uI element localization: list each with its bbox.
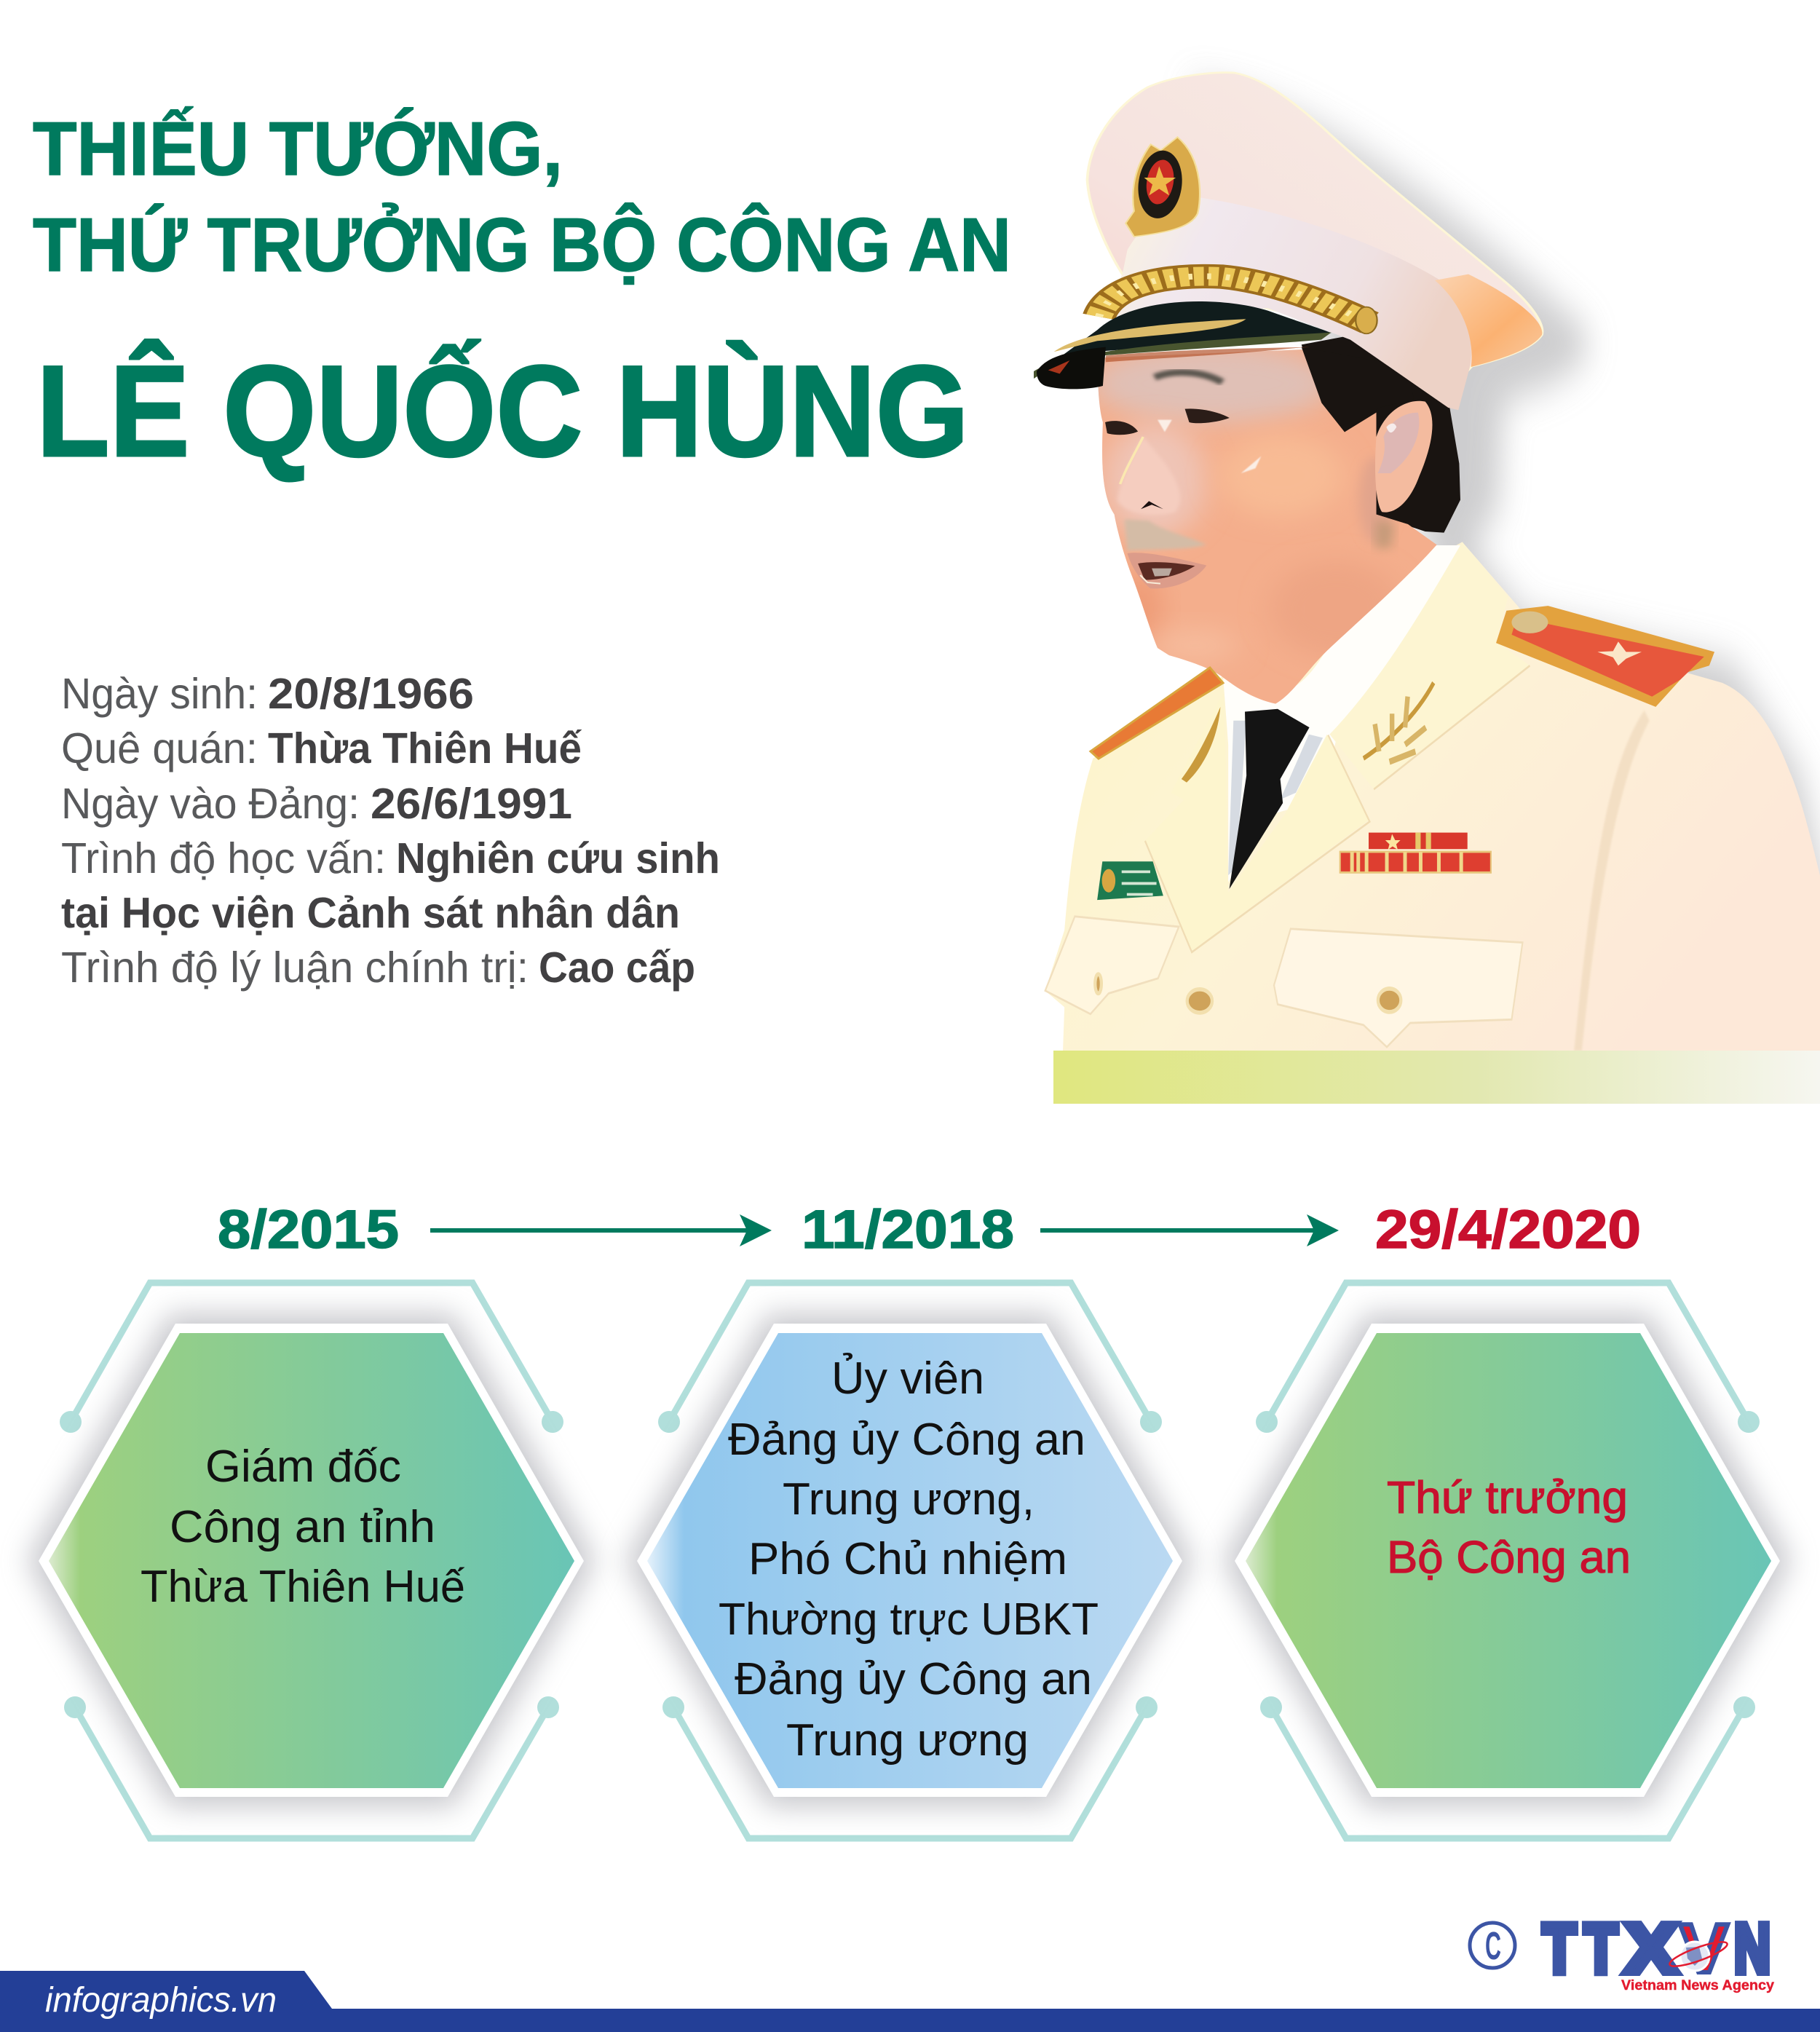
- biography text block: Nghiên cứu sinh: [396, 834, 720, 882]
- logo tagline: Vietnam News Agency: [1621, 1978, 1774, 1993]
- head and face: [1091, 335, 1460, 704]
- title line 2: THỨ TRƯỞNG BỘ CÔNG AN: [33, 202, 1011, 288]
- sleeve shading: [1574, 711, 1650, 1051]
- name tag: [1097, 861, 1163, 900]
- biography text block: Trình độ lý luận chính trị:: [61, 944, 529, 992]
- hexagon 2 text: Trung ương: [786, 1715, 1029, 1766]
- footer band: [0, 1971, 1820, 2032]
- cap badge: [1125, 137, 1200, 237]
- biography text block: Ngày sinh:: [61, 670, 258, 718]
- hexagon fill 1: [49, 1333, 574, 1788]
- footer site name: infographics.vn: [45, 1981, 277, 2020]
- logo wordmark: X: [1625, 1910, 1677, 1988]
- visor band: [1064, 301, 1332, 355]
- cap orange underside: [1435, 274, 1542, 367]
- visor gold leaf: [1054, 319, 1246, 352]
- portrait of Lê Quốc Hùng: [1034, 73, 1820, 1051]
- title: [33, 107, 1011, 483]
- shirt shade: [1228, 721, 1323, 875]
- arrow 1: [430, 1214, 772, 1246]
- mouth: [1128, 553, 1206, 588]
- biography text block: Cao cấp: [539, 944, 695, 992]
- forehead hair line: [1302, 347, 1414, 432]
- hair: [1302, 335, 1460, 533]
- biography text block: 20/8/1966: [268, 670, 474, 718]
- moustache: [1125, 519, 1206, 551]
- hexagon 2 text: [719, 1353, 1099, 1766]
- ear: [1375, 401, 1433, 513]
- hexagon 2 text: Thường trực UBKT: [719, 1594, 1099, 1645]
- logo: TTXVN: [1470, 1910, 1774, 1993]
- gold cord: [1099, 276, 1369, 323]
- date: 29/4/2020: 29/4/2020: [1375, 1199, 1641, 1260]
- biography text block: 26/6/1991: [371, 780, 572, 828]
- cord knot: [1356, 307, 1377, 333]
- left lapel: [1145, 693, 1369, 951]
- nose: [1117, 437, 1180, 515]
- logo wordmark: T: [1584, 1910, 1618, 1988]
- right eye: [1185, 408, 1230, 423]
- biography text block: Ngày vào Đảng:: [61, 780, 360, 828]
- hexagon 2 text: Phó Chủ nhiệm: [748, 1534, 1067, 1584]
- left shoulder board: [1091, 668, 1223, 759]
- cap crown: [1087, 73, 1543, 381]
- biography text block: Quê quán:: [61, 724, 258, 772]
- hexagon 1: [39, 1283, 584, 1838]
- hexagon 1 text: [141, 1442, 465, 1612]
- title line 1: THIẾU TƯỚNG,: [33, 107, 563, 191]
- eyebrow: [1155, 372, 1222, 382]
- hexagon 1 text: Giám đốc: [205, 1442, 401, 1492]
- hexagon 2 text: Đảng ủy Công an: [735, 1654, 1092, 1704]
- hexagon 2 text: Ủy viên: [831, 1353, 984, 1404]
- lapel outline: [1145, 665, 1530, 952]
- hexagon 3 text: [1387, 1473, 1631, 1583]
- copyright icon: C: [1485, 1924, 1501, 1968]
- right collar insignia: [1364, 683, 1433, 762]
- left eye: [1105, 421, 1138, 435]
- uniform body: [1045, 85, 1820, 1051]
- logo wordmark: N: [1734, 1910, 1770, 1988]
- biography text block: [61, 670, 720, 992]
- biography text block: Trình độ học vấn:: [61, 834, 386, 882]
- face base: [1098, 349, 1437, 704]
- portrait drop shadow: [1187, 85, 1820, 1047]
- left pocket flap: [1045, 917, 1179, 1014]
- visor underside: [1037, 347, 1310, 389]
- date: 11/2018: 11/2018: [802, 1199, 1014, 1260]
- hexagon 3: [1235, 1283, 1780, 1838]
- timeline: [218, 1199, 1641, 1260]
- hexagon 2: [637, 1283, 1182, 1838]
- logo wordmark: T: [1543, 1910, 1576, 1988]
- logo wordmark: [1543, 1910, 1770, 1988]
- hexagon 1 text: Thừa Thiên Huế: [141, 1562, 465, 1612]
- hexagon 3 text: Bộ Công an: [1387, 1533, 1631, 1583]
- date: 8/2015: 8/2015: [218, 1199, 399, 1260]
- name: LÊ QUỐC HÙNG: [36, 339, 969, 483]
- uniform jacket: [1045, 542, 1820, 1051]
- arrow 2: [1040, 1214, 1339, 1246]
- footer shape: [0, 1971, 1820, 2032]
- biography text block: tại Học viện Cảnh sát nhân dân: [61, 889, 680, 937]
- jacket buttons: [1095, 974, 1401, 1013]
- hexagon fill 2: [647, 1333, 1173, 1788]
- cap band: [1101, 198, 1471, 410]
- logo wordmark: V: [1679, 1910, 1728, 1988]
- skin highlights: [1158, 420, 1261, 473]
- peaked cap: [1034, 73, 1543, 410]
- hexagon 3 text: Thứ trưởng: [1387, 1473, 1628, 1523]
- right lapel: [1329, 542, 1530, 789]
- hexagon 1 text: Công an tỉnh: [170, 1502, 435, 1552]
- black tie: [1230, 709, 1310, 889]
- hexagon fill 3: [1246, 1333, 1771, 1788]
- decorative strip under portrait: [1053, 1051, 1820, 1104]
- hexagon 2 text: Đảng ủy Công an: [728, 1415, 1085, 1465]
- face shading: [1091, 344, 1402, 663]
- biography text block: Thừa Thiên Huế: [268, 724, 582, 772]
- hexagon 2 text: Trung ương,: [783, 1474, 1034, 1525]
- medal ribbons: [1340, 833, 1491, 872]
- white shirt collar: [1223, 545, 1473, 882]
- logo globe: [1667, 1937, 1730, 1971]
- copyright icon: [1470, 1923, 1515, 1968]
- right pocket flap: [1274, 929, 1522, 1047]
- visor rim: [1034, 333, 1332, 379]
- right shoulder board: [1496, 606, 1714, 707]
- left collar insignia: [1182, 707, 1220, 783]
